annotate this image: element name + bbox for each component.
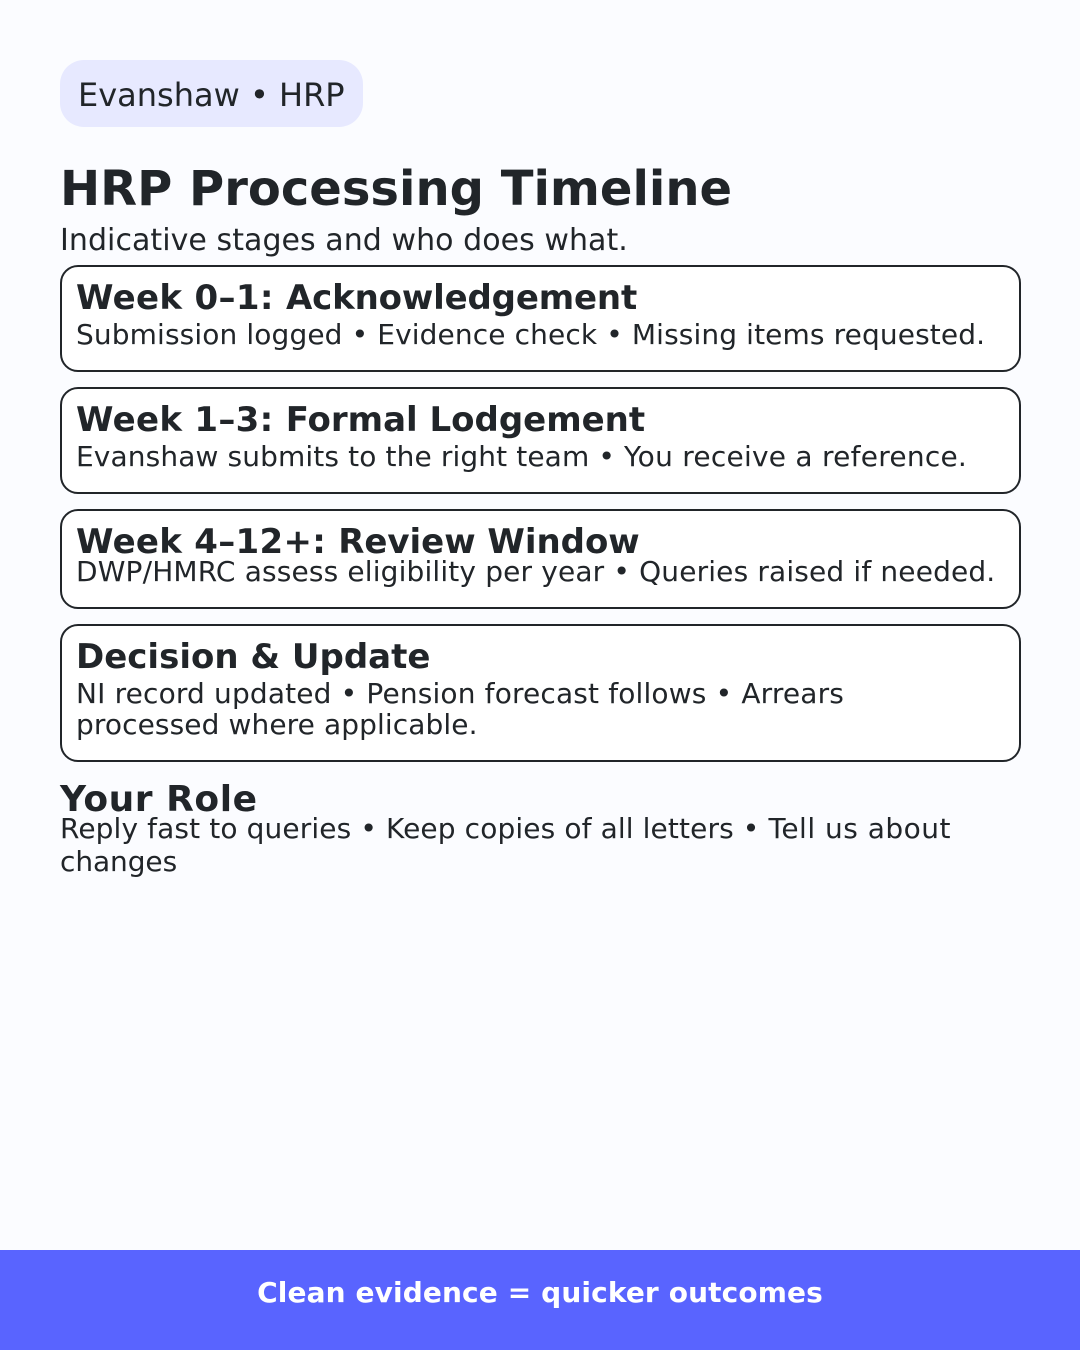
brand pill: Evanshaw • HRP bbox=[78, 76, 345, 114]
text: week 1-3: Evanshaw submits to the right team • You receive a reference. bbox=[76, 440, 967, 473]
text: your role: changes bbox=[60, 845, 177, 878]
heading: your role: Your Role bbox=[60, 779, 258, 820]
panel: decision and update bbox=[60, 624, 1021, 762]
panel: week 1-3 bbox=[60, 387, 1021, 494]
panel: week 0-1 bbox=[60, 265, 1021, 372]
text: your role bbox=[60, 812, 951, 878]
text: week 4-12+: DWP/HMRC assess eligibility per year • Queries raised if needed. bbox=[76, 555, 995, 588]
text: decision and update bbox=[76, 677, 844, 741]
text: your role: Reply fast to queries • Keep copies of all letters • Tell us about bbox=[60, 812, 951, 845]
text: week 0-1: Submission logged • Evidence check • Missing items requested. bbox=[76, 318, 985, 351]
heading: week 0-1: Week 0–1: Acknowledgement bbox=[76, 278, 637, 318]
heading: week 1-3: Week 1–3: Formal Lodgement bbox=[76, 400, 645, 440]
footer banner bbox=[0, 1250, 1080, 1350]
brand pill bbox=[60, 60, 363, 127]
subtitle: Indicative stages and who does what. bbox=[60, 223, 628, 258]
panel: week 4-12+ bbox=[60, 509, 1021, 609]
heading: week 4-12+: Week 4–12+: Review Window bbox=[76, 522, 640, 562]
footer text: Clean evidence = quicker outcomes bbox=[257, 1276, 823, 1309]
text: decision and update: processed where applicable. bbox=[76, 708, 478, 741]
text: decision and update: NI record updated • Pension forecast follows • Arrears bbox=[76, 677, 844, 710]
title: HRP Processing Timeline bbox=[60, 161, 732, 217]
heading: decision and update: Decision & Update bbox=[76, 637, 430, 677]
